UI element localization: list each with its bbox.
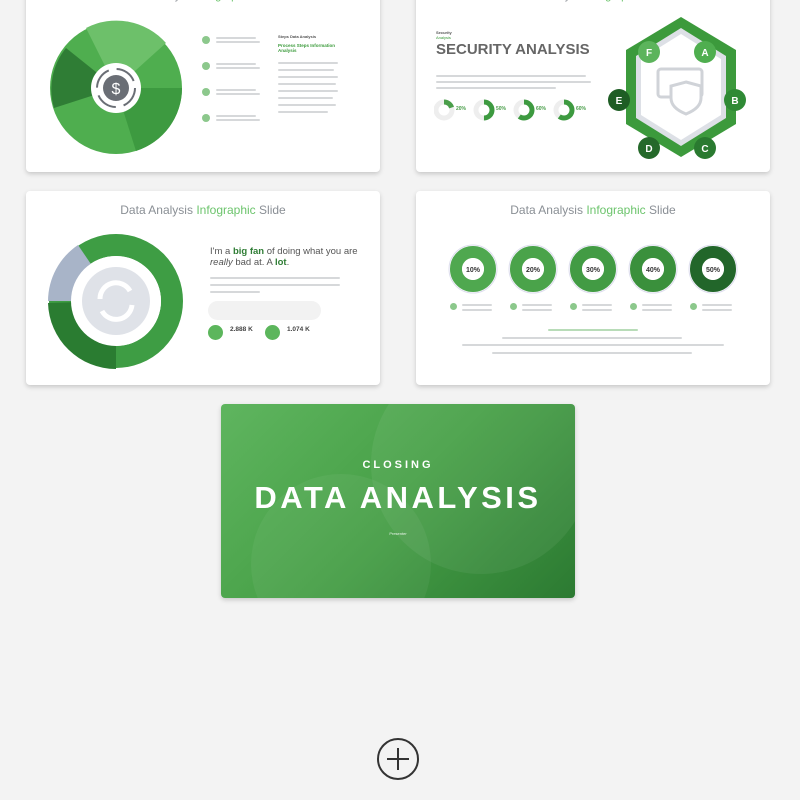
card 3: big fan slide [26, 191, 380, 385]
card 3 title: Data Analysis Infographic Slide [120, 203, 286, 217]
card 3 quote: I'm a big fan of doing what you are really bad at. A lot. [210, 246, 358, 268]
card 2: security analysis [416, 0, 770, 172]
card 1 text block [278, 34, 338, 113]
card 2 donut stats: 20% [456, 106, 467, 112]
card 2 donut stats: 60% [576, 106, 587, 112]
card 4: percentage circles [416, 191, 770, 385]
card 2 hexagon diagram: E [616, 96, 623, 107]
card 2 heading: Analysis [436, 35, 451, 40]
card 3 ring chart [48, 234, 183, 369]
card 2 hexagon diagram: F [646, 48, 652, 59]
closing title: DATA ANALYSIS [254, 480, 542, 515]
card 4 labels row [450, 303, 732, 311]
card 2 heading: SECURITY ANALYSIS [436, 41, 590, 58]
card 1 pie graphic: $ [112, 81, 121, 98]
presenter: Presenter [389, 531, 407, 536]
card 2 donut stats: 50% [496, 106, 507, 112]
card 4 title: Data Analysis Infographic Slide [510, 203, 676, 217]
card 4 circles: 10% [466, 267, 481, 274]
card 2 hexagon diagram: B [731, 96, 739, 107]
card 5: closing slide [221, 404, 575, 598]
icon: add slide button [377, 738, 419, 780]
card 2 heading [436, 30, 590, 58]
card 2 donut stats [434, 100, 587, 120]
card 3 stats: 1.074 K [287, 326, 310, 333]
card 2 hexagon diagram [608, 17, 746, 159]
card 2 hexagon diagram: C [701, 144, 709, 155]
card 3 stats: 2.888 K [230, 326, 253, 333]
card 2 donut stats: 60% [536, 106, 547, 112]
card 2 hexagon diagram: A [701, 48, 709, 59]
card 4 circles: 30% [586, 267, 601, 274]
card 4 circles: 40% [646, 267, 661, 274]
card 3 stats [208, 325, 310, 340]
card 1: steps data analysis [26, 0, 380, 172]
card 1 text block: Process Steps Information Analysis [278, 43, 335, 53]
card 4 circles: 20% [526, 267, 541, 274]
card 1 pie graphic [50, 20, 182, 154]
card 2 hexagon diagram: D [645, 144, 653, 155]
closing label: CLOSING [362, 459, 434, 471]
card 3 callout pill [208, 301, 321, 320]
card 2 heading: Security [436, 30, 452, 35]
card 1 list items [202, 36, 260, 122]
card 4 circles: 50% [706, 267, 721, 274]
card 4 circles [448, 244, 738, 294]
card 1 text block: Steps Data Analysis [278, 34, 316, 39]
